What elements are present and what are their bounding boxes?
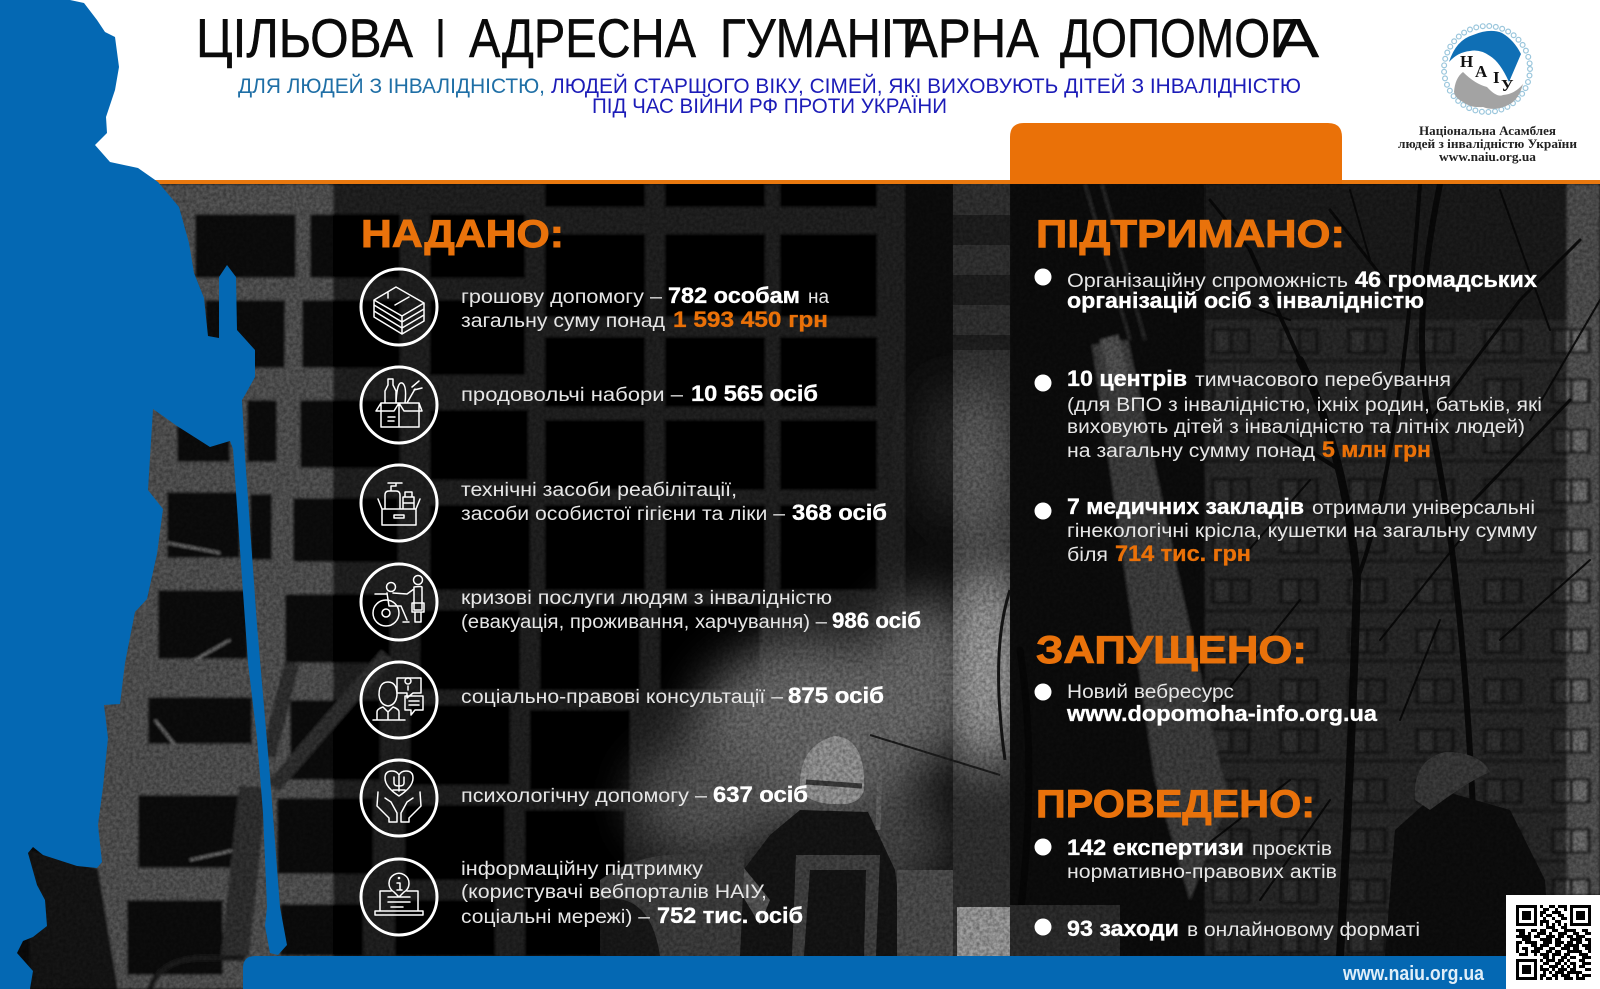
text: legal consultations: соціально-правові консультації – [461,687,783,708]
item: temporary stay centres: виховують дітей з інвалідністю та літніх людей) [1067,417,1525,438]
item: organisational capacity: Організаційну спроможність [1067,271,1348,292]
item: information support [361,859,803,935]
heading: ПРОВЕДЕНО: ПРОВЕДЕНО: [1036,783,1315,826]
title: Т [892,7,924,69]
icon: consultant with speech bubbles [361,662,437,738]
item: temporary stay centres: тимчасового перебування [1195,370,1451,391]
item: legal consultations [361,662,884,738]
item: new web resource: Новий вебресурс [1067,682,1234,703]
item: new web resource [1034,682,1377,726]
subtitle: ПІД ЧАС ВІЙНИ РФ ПРОТИ УКРАЇНИ [592,93,947,118]
bright vertical band [953,184,1010,956]
text: information support: (користувачі вебпорталів НАІУ, [461,882,767,903]
text: cash assistance: загальну суму понад [461,311,665,332]
text: crisis services: 986 осіб [832,608,921,633]
title: АРНА [905,7,1039,69]
text: legal consultations [461,683,884,708]
white header background [0,0,1600,180]
logo: НАІУ: Н [1460,52,1473,71]
text: cash assistance: 1 593 450 грн [673,307,828,332]
title: Г [1270,7,1296,69]
item: temporary stay centres: на загальну сумму понад [1067,441,1315,462]
panel: ЗАПУЩЕНО [1034,629,1377,726]
item: expert reviews: 142 експертизи [1067,835,1244,860]
logo: НАІУ: У [1501,76,1514,95]
item: temporary stay centres: 10 центрів [1067,366,1187,391]
text: rehabilitation aids: 368 осіб [792,500,887,525]
second firefighter and truck on the right [1010,752,1550,956]
title: ДОПОМО [1060,7,1270,69]
icon: food box [361,367,437,443]
item: medical facilities: біля [1067,545,1108,566]
text: cash assistance: на [808,287,829,308]
item: medical facilities: 714 тис. грн [1115,541,1251,566]
text: cash assistance: грошову допомогу – [461,287,662,308]
QR code [1506,895,1600,989]
logo: НАІУ: Національна Асамблея [1419,124,1556,138]
orange header line [0,180,1600,184]
text: legal consultations: 875 осіб [788,683,884,708]
lower left rubble strokes [155,543,235,860]
panel: ПІДТРИМАНО [1034,213,1542,566]
item: cash assistance [361,269,829,345]
right residential building [1205,184,1600,320]
text: psychological help: 637 осіб [713,782,808,807]
text: information support: 752 тис. осіб [657,903,803,928]
logo: НАІУ: людей з інвалідністю України [1398,137,1577,151]
title: ЦІЛЬОВА [196,7,413,69]
title: І [435,7,446,69]
subtitle [238,73,1301,118]
footer url: www.naiu.org.ua [1342,963,1485,985]
text: cash assistance: 782 особам [668,283,800,308]
item: medical facilities: отримали універсальні [1312,498,1535,519]
item: expert reviews: нормативно-правових актів [1067,862,1337,883]
logo: НАІУ: І [1493,68,1500,87]
fire engine crane [1092,340,1228,900]
text: food sets: продовольчі набори – [461,385,683,406]
bottom blue bar [243,956,1600,989]
smoke in the mid section [635,380,980,895]
item: new web resource: www.dopomoha-info.org.ua [1066,701,1377,726]
logo: НАІУ [1398,26,1577,164]
item: online events [1034,916,1420,941]
item: medical facilities: гінекологічні крісла, кушетки на загальну сумму [1067,521,1538,542]
subtitle: ЛЮДЕЙ СТАРШОГО ВІКУ, СІМЕЙ, ЯКІ ВИХОВУЮТЬ ДІТЕЙ З ІНВАЛІДНІСТЮ [551,73,1301,98]
text: information support [461,859,803,928]
item: online events: в онлайновому форматі [1187,920,1420,941]
title: А [1274,7,1319,69]
title: АДРЕСНА [469,7,696,69]
heading: ЗАПУЩЕНО: ЗАПУЩЕНО: [1036,629,1307,672]
panel: ПРОВЕДЕНО [1034,783,1420,941]
item: rehabilitation aids [361,465,887,541]
orange tab [1010,123,1342,184]
dark zone between mid and right [905,184,953,956]
item: organisational capacity: організацій осіб з інвалідністю [1067,288,1424,313]
item: temporary stay centres [1034,366,1542,462]
panel: НАДАНО [361,213,921,935]
item: medical facilities [1034,494,1538,566]
item: expert reviews: проєктів [1252,839,1332,860]
icon: hygiene box [361,465,437,541]
branches over the right side [1015,184,1600,956]
item: online events: 93 заходи [1067,916,1179,941]
text: psychological help [461,782,808,807]
item: psychological help [361,760,808,836]
item: crisis services [361,564,921,640]
heading: НАДАНО: НАДАНО: [361,213,564,256]
heading: ПІДТРИМАНО: ПІДТРИМАНО: [1036,213,1345,256]
text: information support: соціальні мережі) – [461,907,650,928]
item: food sets [361,367,818,443]
item: organisational capacity [1034,267,1538,313]
item: temporary stay centres: (для ВПО з інвалідністю, іхніх родин, батьків, які [1067,395,1542,416]
blue silhouette of a person with a cane [0,0,287,989]
item: medical facilities: 7 медичних закладів [1067,494,1304,519]
text: rehabilitation aids [461,480,887,525]
text: crisis services: кризові послуги людям з інвалідністю [461,588,832,609]
title: ГУМАНІ [720,7,894,69]
icon: laptop with info bubble [361,859,437,935]
subtitle: ДЛЯ ЛЮДЕЙ З ІНВАЛІДНІСТЮ, [238,73,545,98]
text: crisis services [461,588,921,633]
icon: wheelchair with helper [361,564,437,640]
text: psychological help: психологічну допомогу – [461,786,707,807]
item: temporary stay centres: 5 млн грн [1322,437,1431,462]
title [196,7,1319,69]
text: rehabilitation aids: засоби особистої гігієни та ліки – [461,504,785,525]
text: cash assistance [461,283,829,332]
text: crisis services: (евакуація, проживання, харчування) – [461,612,827,633]
logo: НАІУ: www.naiu.org.ua [1439,150,1537,164]
text: food sets: 10 565 осіб [691,381,818,406]
text: information support: інформаційну підтримку [461,859,704,880]
icon: heart with psi in hands [361,760,437,836]
text: rehabilitation aids: технічні засоби реабілітації, [461,480,737,501]
firefighter in the centre [600,722,1000,956]
text: food sets [461,381,818,406]
item: expert reviews [1034,835,1337,883]
logo: НАІУ: А [1475,62,1488,81]
icon: stacks of money [361,269,437,345]
item: organisational capacity: 46 громадських [1355,267,1538,292]
